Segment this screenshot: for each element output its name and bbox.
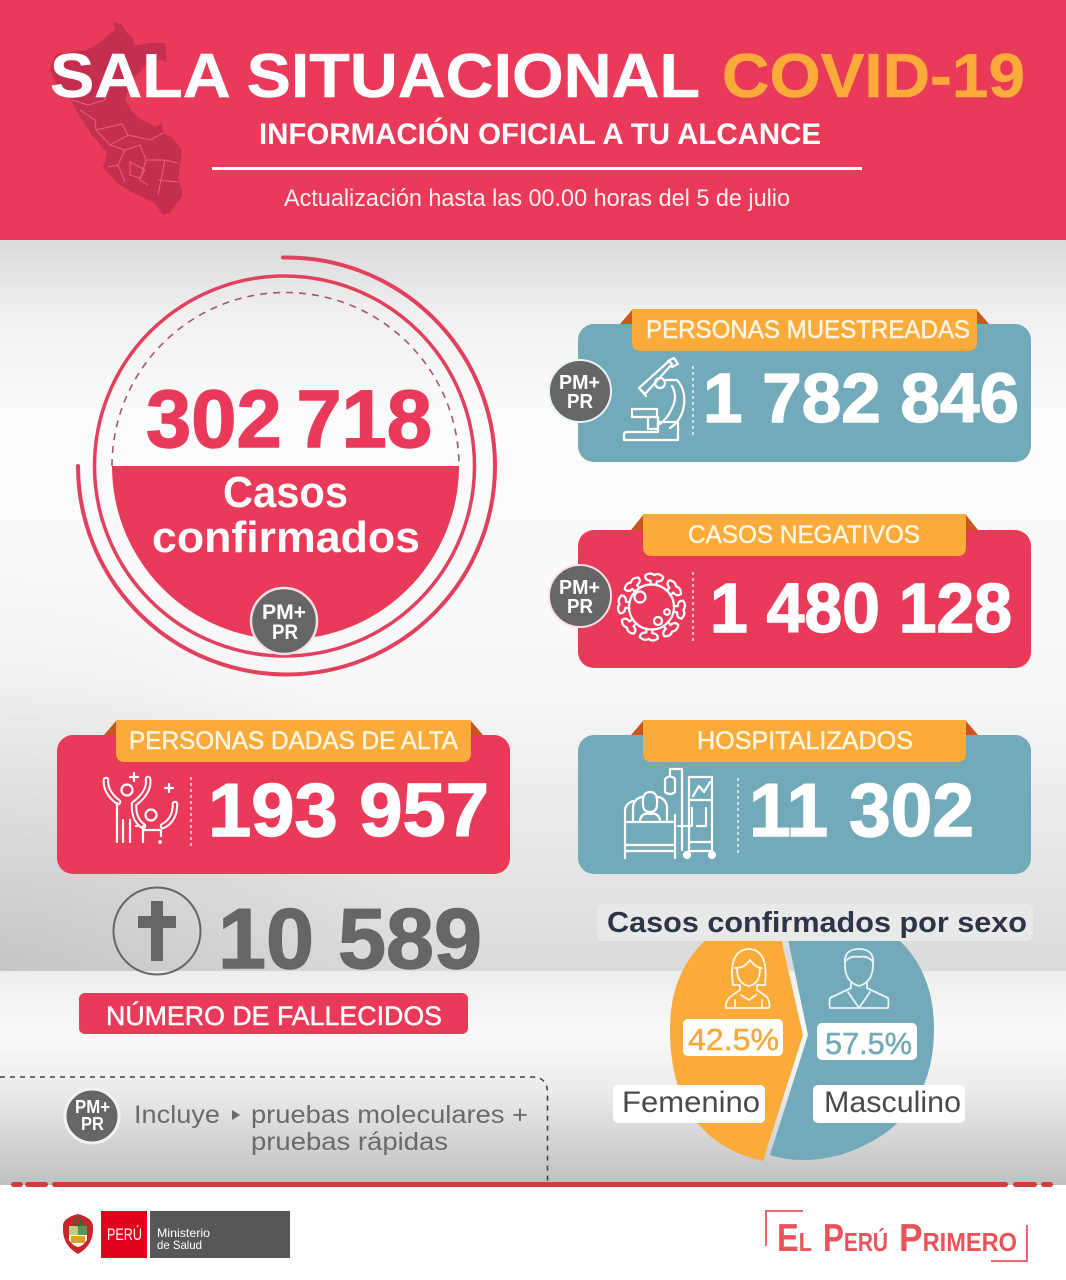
- tab heading: [643, 514, 966, 556]
- badge PM+PR: [549, 360, 611, 422]
- logo: Ministerio de Salud: [63, 1211, 290, 1258]
- map of Peru: [50, 21, 182, 215]
- badge PM+PR: PR: [567, 391, 594, 413]
- icon: hospital bed and monitor: [625, 769, 715, 858]
- filled lower half: [112, 466, 459, 640]
- deaths label: [79, 993, 468, 1034]
- tab heading: PERSONAS MUESTREADAS: [646, 316, 970, 344]
- tab folds: [104, 721, 483, 735]
- panel: casos negativos: [549, 514, 1031, 668]
- chart title: Casos confirmados por sexo: [607, 907, 1027, 939]
- tab heading: PERSONAS DADAS DE ALTA: [129, 727, 458, 755]
- wordmark: El: EL: [777, 1217, 812, 1260]
- arrow: [232, 1110, 240, 1120]
- label: Casos: Casos: [223, 468, 348, 517]
- PERU block: PERÚ: [107, 1225, 142, 1244]
- dashed circle top half: [112, 292, 459, 466]
- badge PM+PR: PM+: [262, 601, 306, 624]
- badge PM+PR: PR: [81, 1114, 104, 1134]
- badge PM+PR: [65, 1089, 119, 1143]
- badge PM+PR: PM+: [559, 577, 600, 599]
- logo: El Perú Primero: [766, 1211, 1027, 1261]
- tab heading: [116, 720, 471, 762]
- badge PM+PR: [549, 565, 611, 627]
- value: 1 480 128: [710, 569, 1012, 647]
- header divider: [212, 167, 862, 170]
- label: 57.5%: 57.5%: [825, 1026, 912, 1061]
- badge PM+PR: PM+: [75, 1097, 110, 1117]
- footnote text: Incluye: Incluye: [134, 1101, 220, 1129]
- bracket corners: [766, 1211, 1027, 1261]
- deaths block: [79, 888, 482, 1034]
- value: 11 302: [749, 768, 974, 852]
- ministry block: [150, 1211, 290, 1258]
- inner ring: [94, 276, 474, 656]
- dashed frame: [0, 1077, 548, 1182]
- pie chart: [670, 925, 934, 1161]
- panel: personas muestreadas: [549, 309, 1031, 462]
- panel: casos confirmados: [78, 257, 495, 674]
- dashed separator: [692, 366, 694, 437]
- ministry block: Ministerio: [157, 1226, 210, 1240]
- deaths label: NÚMERO DE FALLECIDOS: [106, 1000, 442, 1031]
- label: Femenino: Femenino: [622, 1086, 760, 1119]
- badge PM+PR: PR: [567, 596, 594, 618]
- header banner: [0, 0, 1066, 240]
- deaths value: 10 589: [218, 892, 482, 987]
- label: confirmados: confirmados: [152, 513, 420, 562]
- icon: virus: [618, 573, 685, 641]
- title: Sala Situacional: SALA SITUACIONAL: [50, 42, 700, 111]
- tab folds: [631, 721, 978, 735]
- wordmark: Perú: PERÚ: [823, 1217, 888, 1260]
- tab folds: [631, 515, 978, 530]
- title: COVID-19: COVID-19: [722, 42, 1025, 111]
- badge PM+PR: [251, 588, 317, 654]
- badge PM+PR: PR: [272, 621, 298, 644]
- badge PM+PR: PM+: [559, 372, 600, 394]
- dashed separator: [737, 778, 739, 853]
- icon: cross: [114, 888, 200, 974]
- value: 1 782 846: [703, 359, 1019, 437]
- tab folds: [620, 310, 989, 324]
- dashed separator: [692, 572, 694, 642]
- panel: hospitalizados: [578, 720, 1031, 874]
- icon: family celebrating: [106, 773, 175, 843]
- icon: microscope: [624, 358, 684, 440]
- icon: man: [830, 949, 888, 1008]
- tab heading: [643, 720, 966, 762]
- footer rule: [11, 1182, 1053, 1187]
- label: Masculino: Masculino: [824, 1086, 961, 1119]
- value: 193 957: [208, 768, 489, 852]
- update note: Actualización hasta las 00.00 horas del 5 de julio: [284, 185, 790, 212]
- panel: casos confirmados por sexo: [597, 904, 1033, 1161]
- footnote: [0, 1077, 548, 1182]
- wordmark: Primero: PRIMERO: [899, 1217, 1017, 1260]
- tab heading: HOSPITALIZADOS: [697, 727, 913, 755]
- footnote text: rapid tests: pruebas rápidas: [251, 1128, 448, 1156]
- icon: coat of arms: [63, 1214, 93, 1254]
- tab heading: CASOS NEGATIVOS: [688, 521, 920, 549]
- footnote text: tests: pruebas moleculares +: [251, 1101, 528, 1129]
- icon: woman: [726, 949, 770, 1008]
- ministry block: de Salud: [157, 1238, 202, 1252]
- dashed separator: [190, 777, 192, 847]
- panel: personas dadas de alta: [57, 720, 510, 874]
- total number: 302 718: [146, 374, 432, 465]
- outer ring arc: [78, 257, 495, 674]
- PERU block: [101, 1211, 147, 1258]
- tab heading: [632, 309, 977, 351]
- subtitle: INFORMACIÓN OFICIAL A TU ALCANCE: [259, 117, 821, 151]
- label: 42.5%: 42.5%: [688, 1022, 779, 1057]
